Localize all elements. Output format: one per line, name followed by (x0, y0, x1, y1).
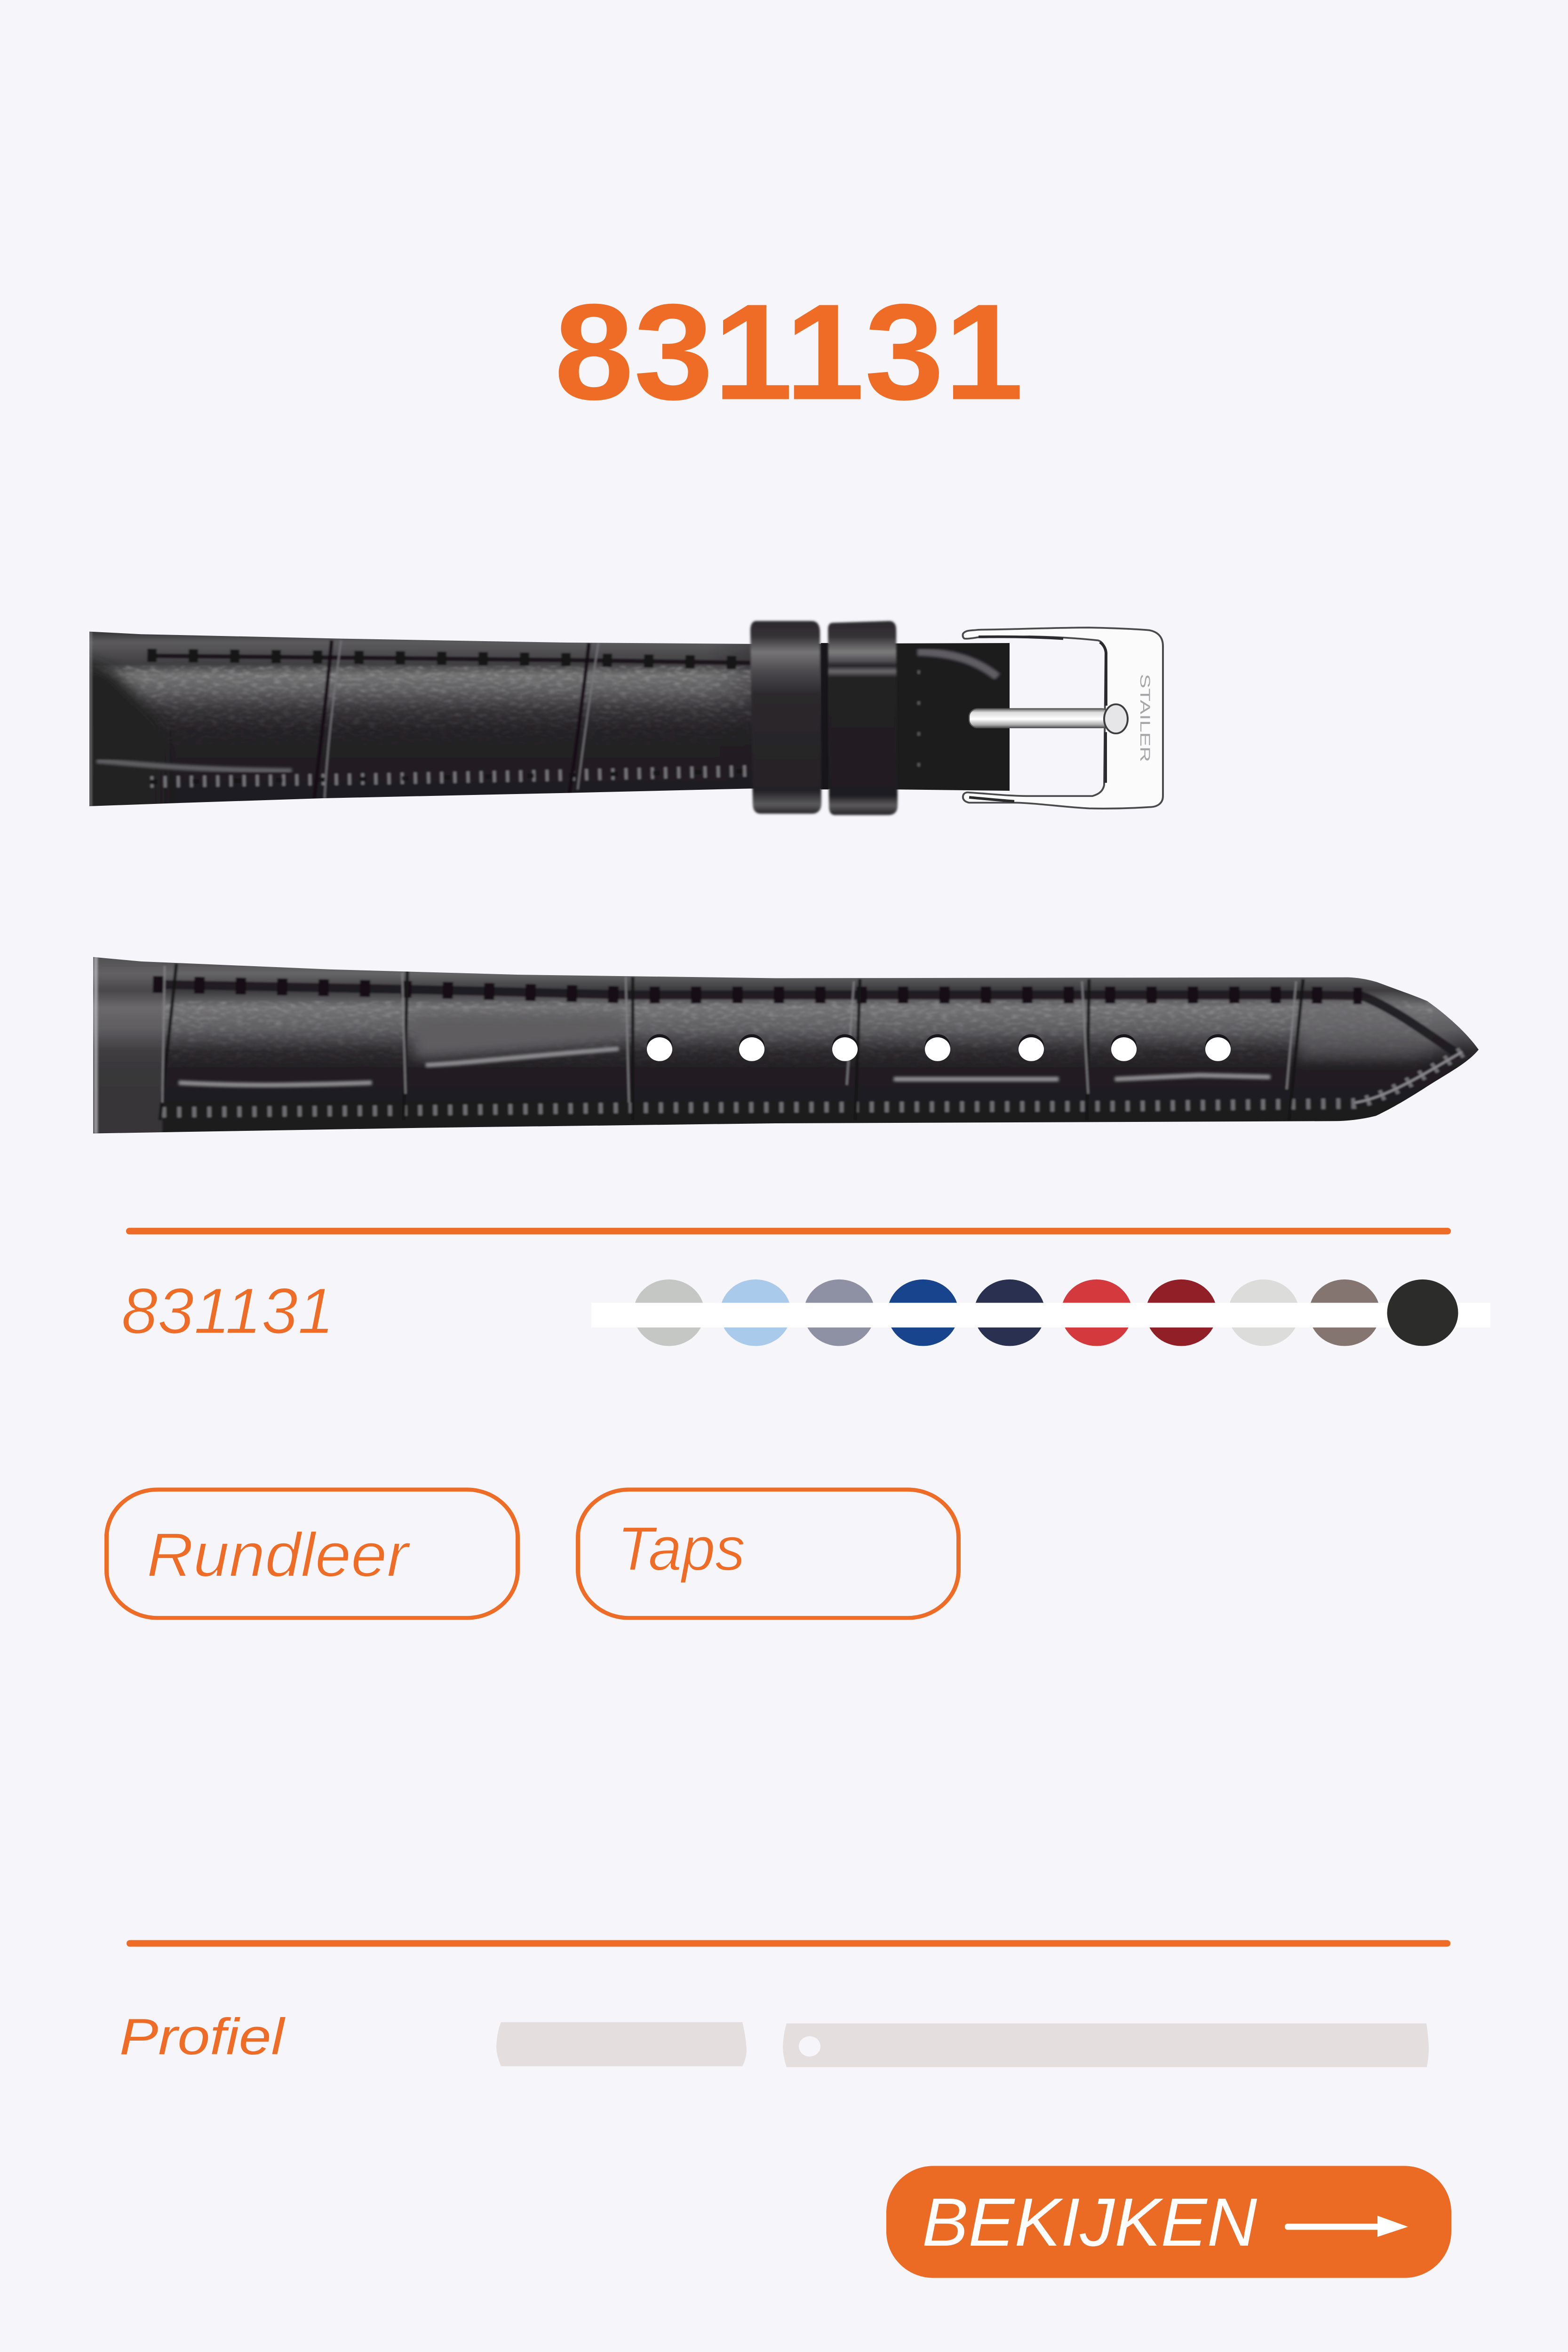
colour swatches (591, 1279, 1490, 1346)
profile: tip part with hole (783, 2024, 1429, 2067)
tag: Rundleer: Rundleer (147, 1520, 411, 1589)
buckle inner shading (969, 636, 1106, 802)
divider bottom (127, 1940, 1450, 1947)
highlight valley (414, 1014, 626, 1058)
buckle engraving: STAILER (1137, 674, 1153, 762)
top stitching with tip contour (153, 985, 1461, 1056)
highlight arcs near buckle (917, 652, 997, 677)
cut edge (94, 957, 97, 1134)
bottom stitching (151, 771, 750, 782)
model number: 831131 (121, 1275, 334, 1347)
watch strap: tip half with holes (89, 953, 1487, 1138)
icon: arrow (1285, 2216, 1408, 2237)
tag: Taps (578, 1490, 959, 1618)
title: 831131 (554, 275, 1024, 428)
profile: buckle part (496, 2022, 747, 2066)
buckle pin (969, 704, 1128, 733)
keeper 2 (828, 621, 898, 815)
watch strap: buckle half (80, 621, 1163, 816)
scale creases (160, 964, 1303, 1120)
tip shading (1298, 997, 1454, 1058)
lower left grain (96, 761, 292, 771)
leather body with buckle end (80, 626, 1016, 816)
tag: Rundleer (106, 1490, 517, 1618)
button: BEKIJKEN: BEKIJKEN (922, 2184, 1257, 2260)
buckle frame (963, 628, 1163, 809)
button: BEKIJKEN (886, 2166, 1451, 2278)
product card (89, 304, 1490, 2278)
bottom stitching with tip contour (162, 1052, 1462, 1112)
tag: Taps: Taps (617, 1514, 745, 1583)
buckle stitch (917, 670, 920, 789)
top stitching (147, 656, 750, 663)
shelf highlights (179, 1049, 1270, 1085)
left margin shade (96, 957, 162, 1134)
profile label: Profiel (119, 2008, 286, 2065)
keeper 1 (750, 621, 821, 814)
strap holes (647, 1034, 1231, 1061)
scale creases (314, 640, 332, 798)
cut edge (89, 632, 92, 806)
gap between keepers (821, 643, 828, 789)
divider top (126, 1228, 1451, 1234)
